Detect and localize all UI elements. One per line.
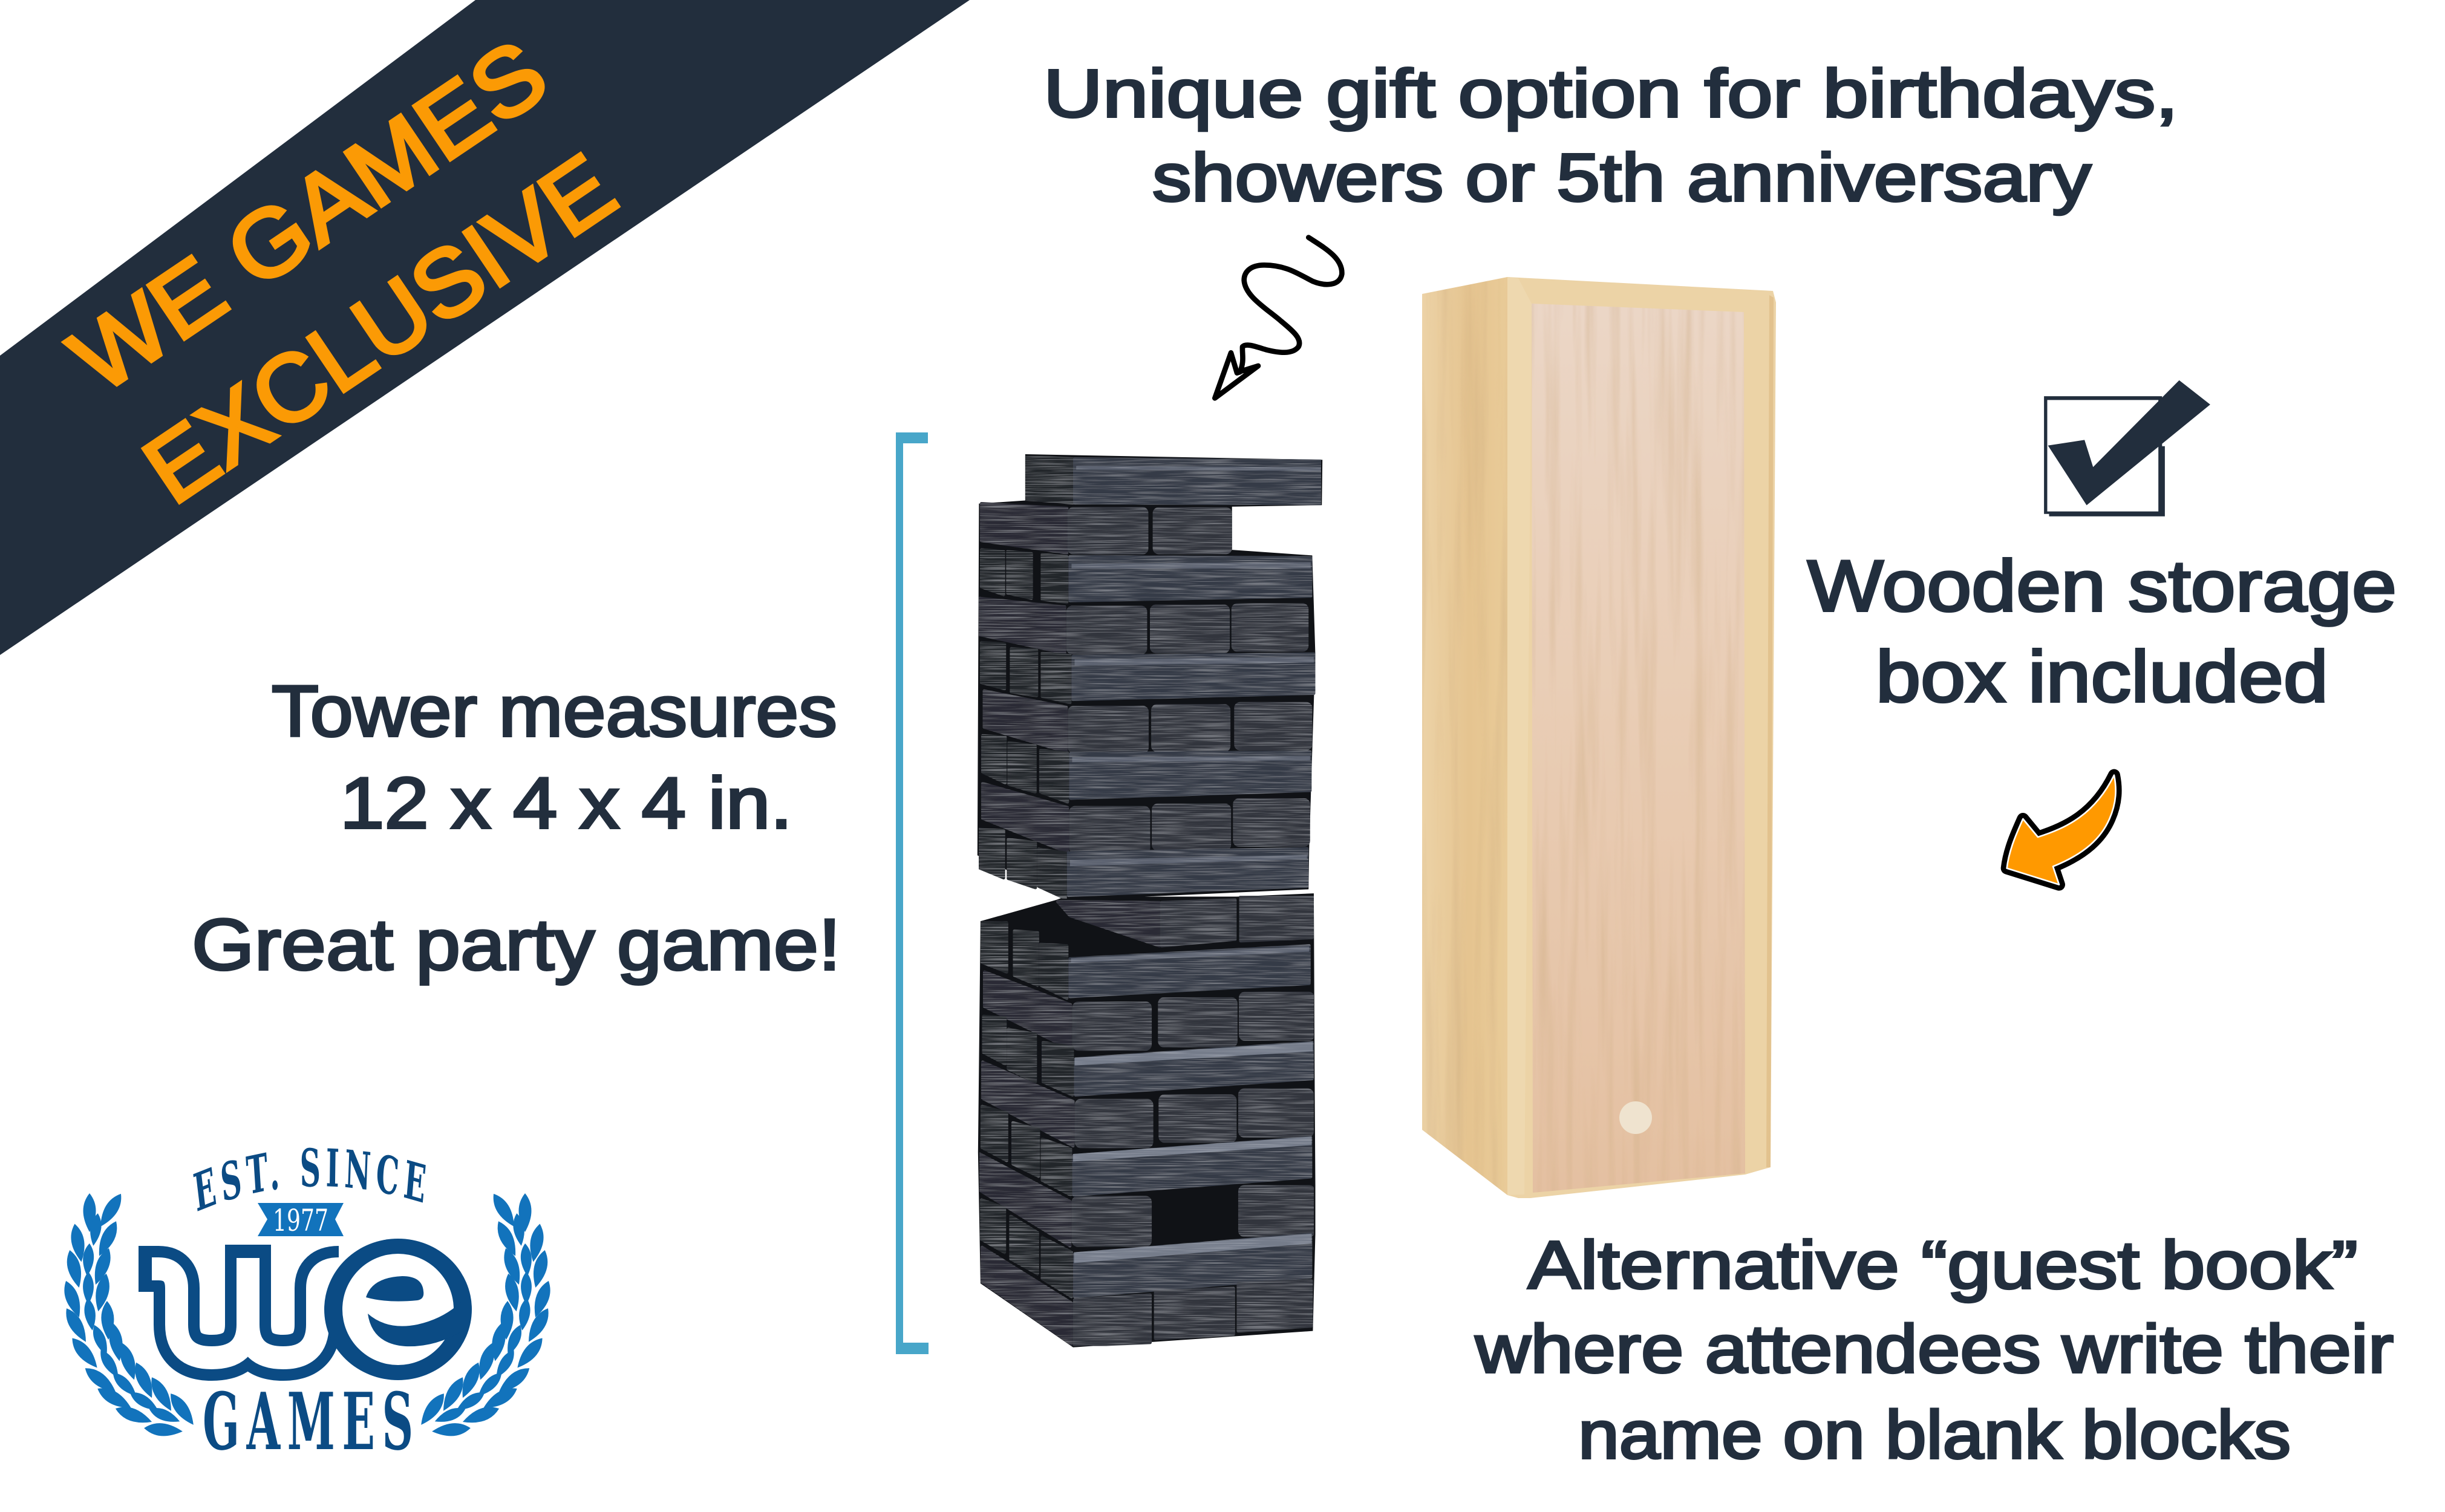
- icon: check box: [2044, 380, 2210, 516]
- banner: diagonal ribbon: [0, 0, 970, 655]
- box front frame: [1507, 277, 1776, 1198]
- tower upper section: [979, 456, 1321, 899]
- logo: GAMES: GAMES: [203, 1375, 413, 1468]
- logo: 1977 ribbon: 1977: [273, 1203, 328, 1238]
- text: guest book: name on blank blocks: [1578, 1397, 2291, 1473]
- logo: WE Games crest: [64, 1148, 550, 1468]
- icon: squiggly arrow to tower: [1215, 238, 1342, 398]
- text: gift option: Unique gift option for birthdays,: [1043, 56, 2178, 131]
- banner text: EXCLUSIVE: EXCLUSIVE: [126, 134, 633, 524]
- text: wooden storage box: [1807, 546, 2397, 717]
- text: gift option: showers or 5th anniversary: [1152, 140, 2091, 215]
- tower upper silhouette: [978, 454, 1322, 900]
- text: gift option: [1043, 56, 2178, 215]
- logo: left laurel: [60, 1190, 198, 1438]
- bracket: tower height: [896, 432, 929, 1354]
- text: tower measures: 12 x 4 x 4 in.: [340, 763, 792, 844]
- text: guest book: [1475, 1227, 2394, 1473]
- logo: EST. SINCE arc: EST. SINCE: [193, 1148, 426, 1211]
- text: wooden storage box: box included: [1876, 636, 2328, 717]
- text: great party game: Great party game!: [192, 904, 841, 985]
- tower lower silhouette: [978, 893, 1315, 1347]
- text: guest book: where attendees write their: [1475, 1311, 2394, 1387]
- wooden storage box: [1422, 277, 1776, 1198]
- tower lower section: [979, 896, 1314, 1346]
- tower: black wooden blocks: [978, 454, 1322, 1347]
- icon: orange curved arrow: [2007, 775, 2116, 885]
- box sliding lid panel: [1532, 304, 1745, 1193]
- banner text: WE GAMES: WE GAMES: [53, 20, 565, 413]
- logo: WE lettering: [139, 1239, 472, 1380]
- box finger hole: [1619, 1101, 1652, 1134]
- text: guest book: Alternative “guest book”: [1528, 1227, 2358, 1303]
- text: wooden storage box: Wooden storage: [1807, 546, 2397, 627]
- text: tower measures: Tower measures: [272, 671, 837, 752]
- box side panel: [1422, 277, 1507, 1195]
- logo: right laurel: [416, 1190, 555, 1438]
- text: tower measures: [272, 671, 837, 844]
